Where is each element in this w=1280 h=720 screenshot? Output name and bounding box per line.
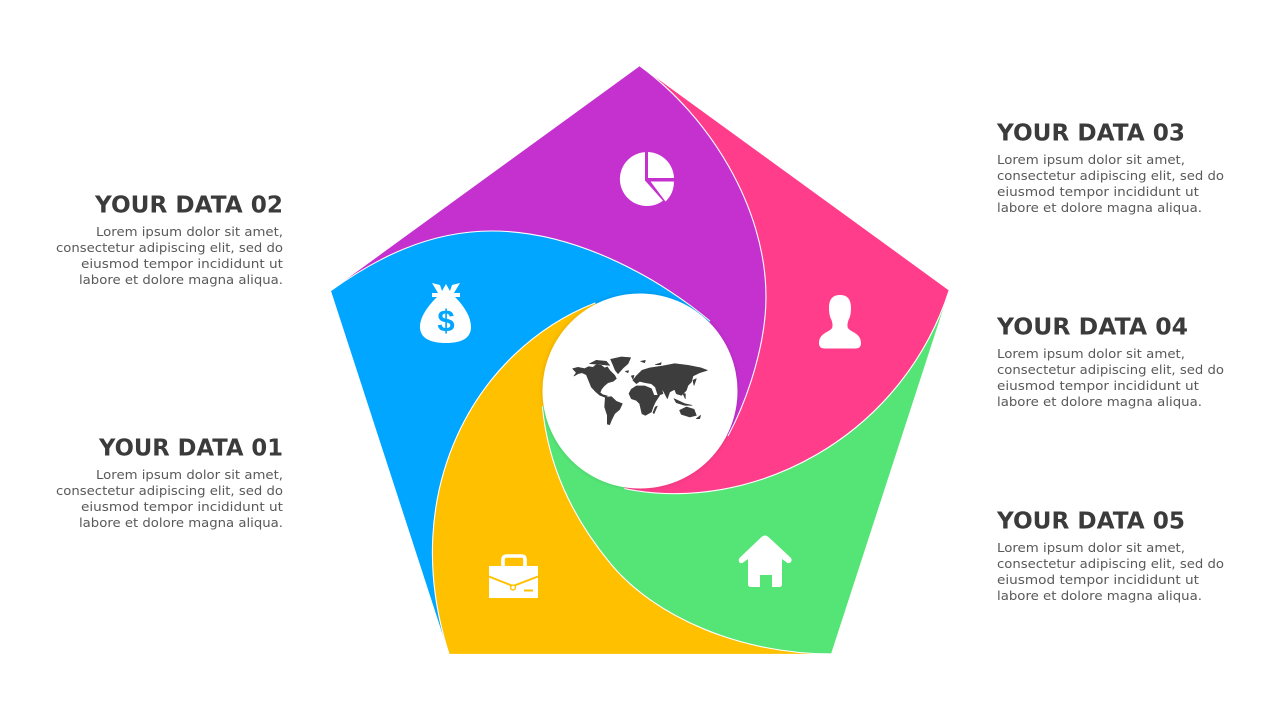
icon: money bag [420, 283, 471, 343]
body: your data 04: eiusmod tempor incididunt ut [997, 378, 1199, 393]
body: your data 01: eiusmod tempor incididunt ut [81, 499, 283, 514]
body: your data 04: consectetur adipiscing elit, sed do [997, 362, 1224, 377]
body: your data 02: consectetur adipiscing elit, sed do [56, 240, 283, 255]
body: your data 01 [56, 467, 283, 530]
icon: house [739, 536, 792, 587]
body: your data 03: consectetur adipiscing elit, sed do [997, 168, 1224, 183]
icon: money bag: $ [437, 303, 455, 338]
body: your data 01: labore et dolore magna aliqua. [79, 515, 283, 530]
icon: person [819, 295, 861, 348]
body: your data 02: Lorem ipsum dolor sit amet, [96, 224, 283, 239]
text block: your data 04 [996, 314, 1224, 409]
segment: purple [331, 66, 766, 436]
segment: blue [331, 231, 710, 654]
center circle [542, 294, 738, 488]
segment: green [542, 291, 949, 654]
heading: your data 03: YOUR DATA 03 [996, 120, 1185, 146]
body: your data 05: labore et dolore magna aliqua. [997, 588, 1202, 603]
body: your data 02: labore et dolore magna aliqua. [79, 272, 283, 287]
text block: your data 03 [996, 120, 1224, 215]
body: your data 03: labore et dolore magna aliqua. [997, 200, 1202, 215]
body: your data 02: eiusmod tempor incididunt ut [81, 256, 283, 271]
text block: your data 05 [996, 508, 1224, 603]
heading: your data 01: YOUR DATA 01 [98, 436, 283, 462]
heading: your data 05: YOUR DATA 05 [996, 508, 1185, 534]
text block: your data 01 [56, 436, 283, 530]
body: your data 02 [56, 224, 283, 287]
segment: pink [624, 66, 949, 494]
body: your data 05 [997, 540, 1224, 603]
body: your data 04 [997, 346, 1224, 409]
segment: yellow [432, 303, 831, 654]
body: your data 05: eiusmod tempor incididunt ut [997, 572, 1199, 587]
body: your data 01: Lorem ipsum dolor sit amet, [96, 467, 283, 482]
icon: briefcase [489, 556, 538, 598]
icon: pie chart [620, 152, 674, 206]
body: your data 03: eiusmod tempor incididunt ut [997, 184, 1199, 199]
body: your data 05: Lorem ipsum dolor sit amet, [997, 540, 1185, 555]
icon: world map [573, 357, 707, 425]
heading: your data 04: YOUR DATA 04 [996, 314, 1188, 340]
body: your data 05: consectetur adipiscing elit, sed do [997, 556, 1224, 571]
pentagon spiral diagram [331, 66, 949, 654]
text block: your data 02 [56, 192, 283, 287]
body: your data 04: Lorem ipsum dolor sit amet, [997, 346, 1185, 361]
heading: your data 02: YOUR DATA 02 [94, 192, 283, 218]
body: your data 03: Lorem ipsum dolor sit amet, [997, 152, 1185, 167]
body: your data 04: labore et dolore magna aliqua. [997, 394, 1202, 409]
body: your data 01: consectetur adipiscing elit, sed do [56, 483, 283, 498]
body: your data 03 [997, 152, 1224, 215]
